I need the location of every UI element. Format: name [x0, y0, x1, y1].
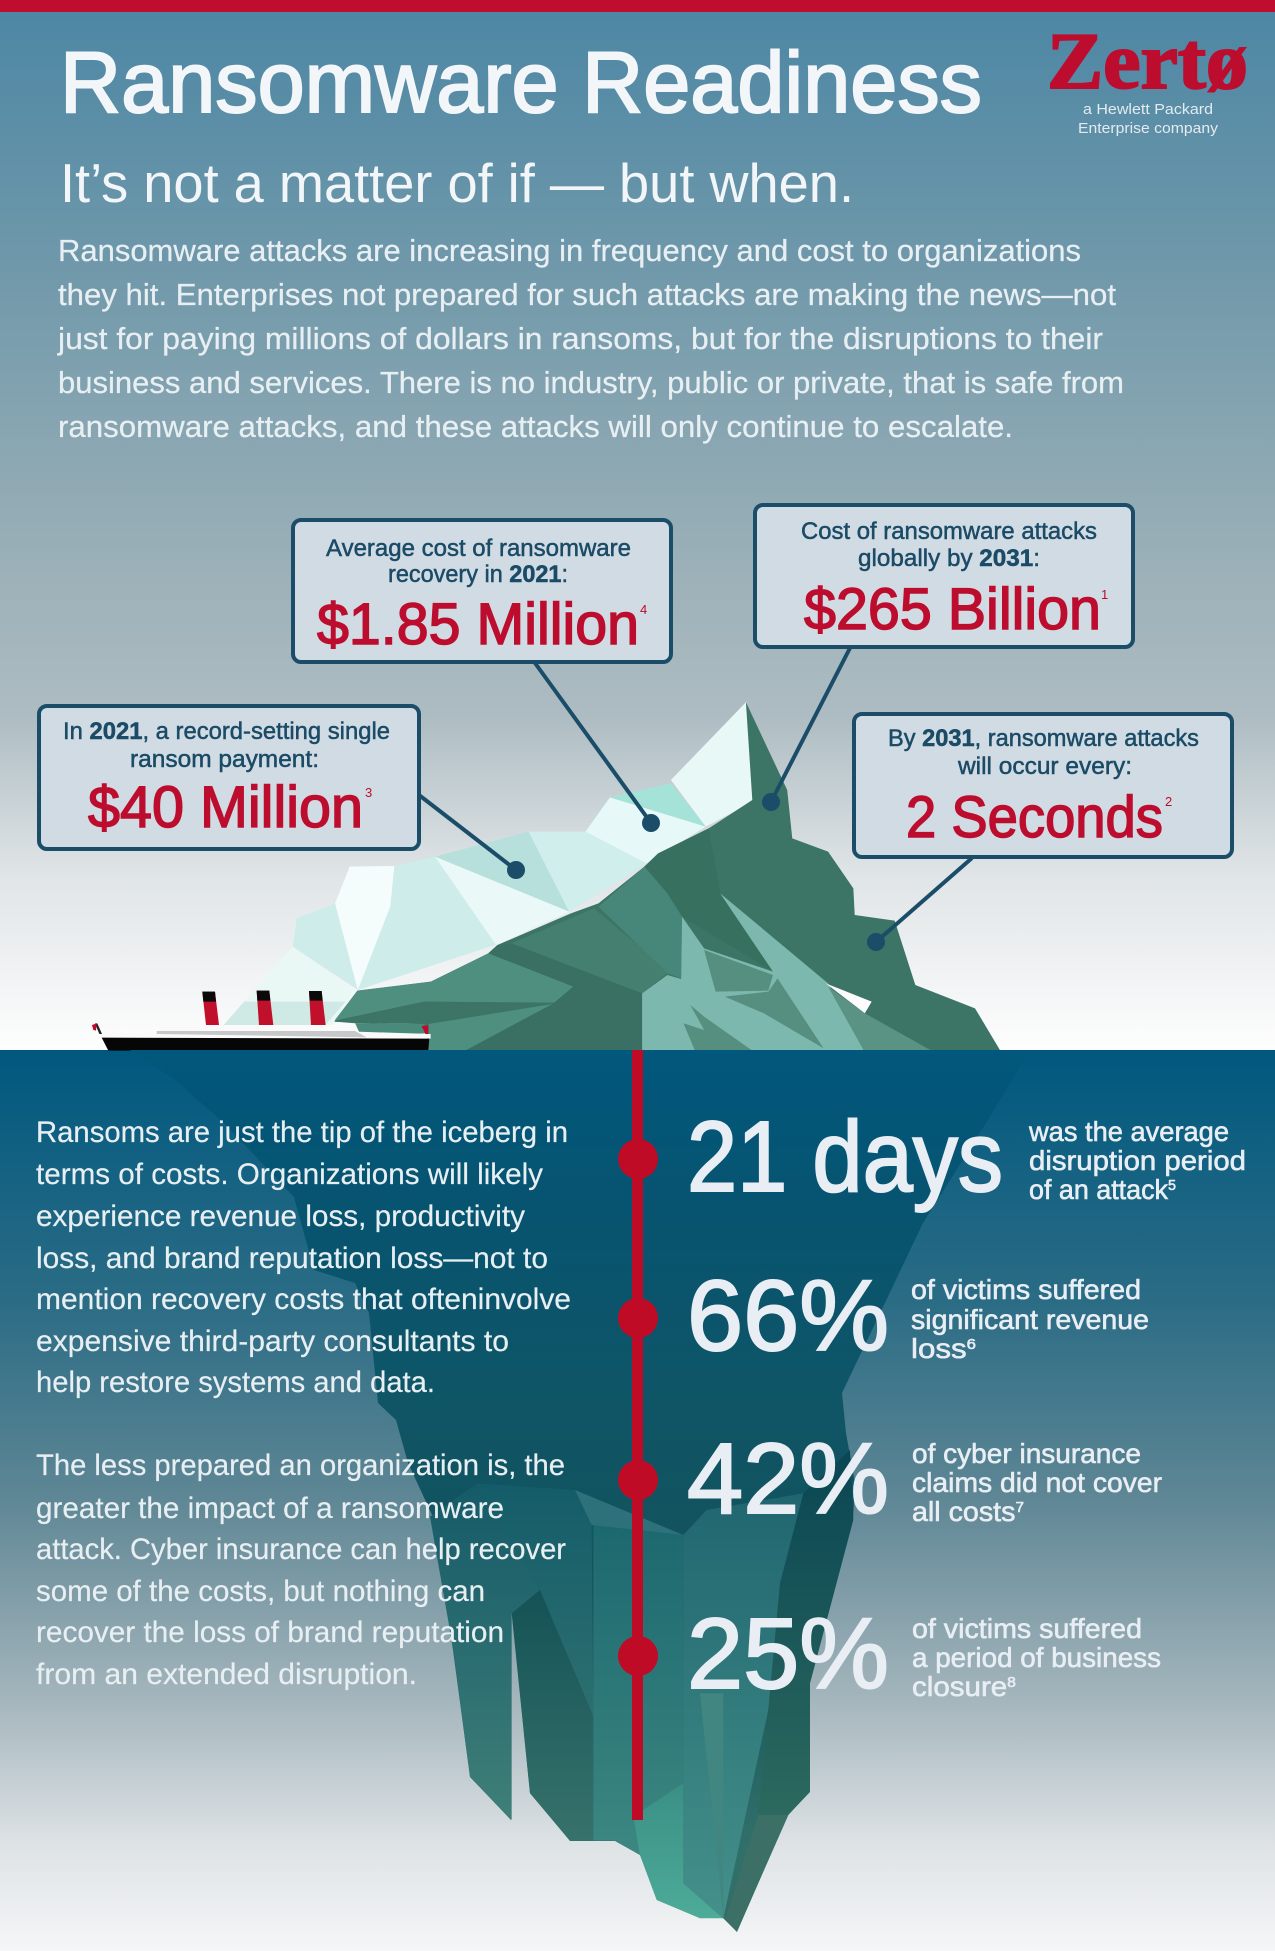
stat: 25% — [687, 1598, 1161, 1710]
iceberg below water: silhouette — [130, 1050, 1030, 1932]
left text: less prepared — [36, 1449, 566, 1691]
stat: 25%: a period of business — [912, 1642, 1161, 1673]
intro paragraph: business and services. There is no industry, public or private, that is safe from — [58, 365, 1124, 400]
stat: 21 days: 5 — [1168, 1177, 1176, 1194]
card: $265 Billion — [755, 505, 1133, 811]
intro paragraph: ransomware attacks, and these attacks will only continue to escalate. — [58, 409, 1013, 444]
stat: 42%: of cyber insurance — [912, 1438, 1141, 1469]
subtitle: It’s not a matter of if — but when. — [60, 152, 854, 214]
logo: Zerto: Enterprise company — [1078, 120, 1219, 137]
left text: tip of the iceberg: Ransoms are just the tip of the iceberg in — [36, 1116, 568, 1149]
iceberg above water: rock facets — [334, 702, 1000, 1051]
stat: 25%: 8 — [1007, 1674, 1016, 1691]
intro paragraph: Ransomware attacks are increasing in frequency and cost to organizations — [58, 233, 1081, 268]
card: 2 Seconds: By 2031, ransomware attacks — [888, 725, 1199, 752]
card: $1.85 Million: Average cost of ransomware — [326, 535, 631, 562]
stat: 25%: closure — [912, 1671, 1002, 1702]
stat: 66%: significant revenue — [911, 1304, 1149, 1335]
left text: less prepared: from an extended disruption. — [36, 1658, 417, 1691]
left text: less prepared: recover the loss of brand reputation — [36, 1616, 504, 1649]
card: 2 Seconds: 2 Seconds — [906, 785, 1163, 850]
card: 2 Seconds — [854, 714, 1232, 951]
sea background — [0, 1050, 1275, 1951]
stat: 25%: 25% — [687, 1598, 889, 1710]
stat: 21 days: was the average — [1028, 1116, 1229, 1147]
card: $265 Billion: Cost of ransomware attacks — [801, 518, 1097, 545]
stat: 66%: loss — [911, 1333, 961, 1364]
stat: 42% — [687, 1423, 1162, 1535]
stat: 66% — [687, 1260, 1149, 1372]
card: $265 Billion: $265 Billion — [804, 577, 1101, 642]
stat: 25%: of victims suffered — [912, 1613, 1142, 1644]
stat: 42%: 42% — [687, 1423, 889, 1535]
stat: 66%: of victims suffered — [911, 1274, 1141, 1305]
red timeline — [618, 1050, 658, 1820]
left text: less prepared: The less prepared an organization is, the — [36, 1449, 565, 1482]
left text: less prepared: some of the costs, but nothing can — [36, 1575, 485, 1608]
stat: 42%: claims did not cover — [912, 1467, 1162, 1498]
left text: tip of the iceberg: experience revenue loss, productivity — [36, 1200, 525, 1233]
left text: less prepared: greater the impact of a ransomware — [36, 1492, 504, 1525]
iceberg below water: facets — [430, 1450, 853, 1932]
intro paragraph: they hit. Enterprises not prepared for such attacks are making the news—not — [58, 277, 1116, 312]
stat: 21 days: disruption period — [1029, 1145, 1246, 1176]
left text: tip of the iceberg: terms of costs. Organizations will likely — [36, 1158, 543, 1191]
card: $40 Million: 3 — [365, 785, 372, 800]
left text: tip of the iceberg: mention recovery costs that ofteninvolve — [36, 1283, 571, 1316]
card: $40 Million: $40 Million — [88, 775, 363, 840]
iceberg above water: ice facets — [224, 702, 756, 1025]
stat: 21 days: of an attack — [1029, 1174, 1174, 1205]
stat: 42%: 7 — [1015, 1499, 1024, 1516]
top red bar — [0, 0, 1275, 12]
title: Ransomware Readiness — [60, 35, 982, 131]
logo: Zerto: a Hewlett Packard — [1083, 101, 1213, 118]
sky background — [0, 0, 1275, 1051]
card: $1.85 Million: $1.85 Million — [317, 592, 639, 657]
card: $40 Million: In 2021, a record-setting single — [63, 718, 390, 745]
logo: Zerto: Zertø — [1047, 18, 1248, 106]
card: $265 Billion: globally by 2031: — [858, 545, 1040, 572]
card: $1.85 Million: recovery in 2021: — [388, 561, 568, 588]
stat: 21 days — [687, 1101, 1246, 1213]
card: $265 Billion: 1 — [1101, 587, 1108, 602]
stat: 66%: 6 — [967, 1336, 976, 1353]
card: $40 Million — [39, 706, 525, 879]
stat: 21 days: 21 days — [687, 1101, 1003, 1213]
intro paragraph — [57, 233, 1124, 444]
card: $40 Million: ransom payment: — [130, 746, 319, 773]
left text: tip of the iceberg: loss, and brand reputation loss—not to — [36, 1242, 548, 1275]
stat: 66%: 66% — [687, 1260, 889, 1372]
intro paragraph: just for paying millions of dollars in ransoms, but for the disruptions to their — [57, 321, 1103, 356]
left text: tip of the iceberg: expensive third-party consultants to — [36, 1325, 509, 1358]
card: 2 Seconds: 2 — [1165, 794, 1172, 809]
stat: 42%: all costs — [912, 1496, 1013, 1527]
card: 2 Seconds: will occur every: — [957, 753, 1132, 780]
card: $1.85 Million: 4 — [640, 602, 647, 617]
left text: tip of the iceberg: help restore systems and data. — [36, 1366, 435, 1399]
left text: less prepared: attack. Cyber insurance can help recover — [36, 1533, 566, 1566]
ship — [92, 991, 431, 1051]
card: $1.85 Million — [293, 520, 671, 832]
left text: tip of the iceberg — [36, 1116, 571, 1399]
